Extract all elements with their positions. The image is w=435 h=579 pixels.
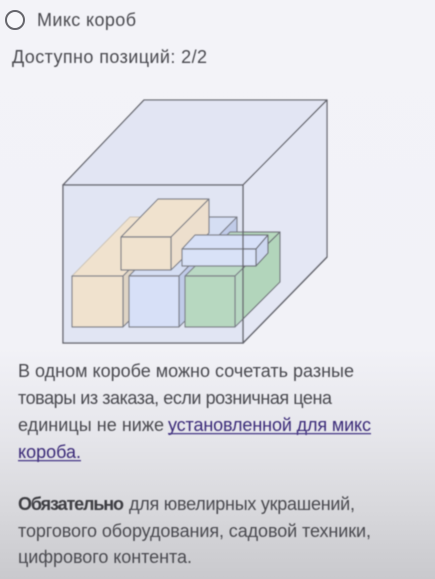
description paragraph bbox=[18, 361, 371, 462]
link: установленной для микс bbox=[168, 415, 371, 435]
description paragraph: В одном коробе можно сочетать разные bbox=[18, 361, 354, 381]
available positions: Доступно позиций: 2/2 bbox=[12, 47, 207, 67]
illustration: mixed box bbox=[63, 100, 327, 343]
link bbox=[18, 415, 371, 462]
mandatory paragraph: для ювелирных украшений, bbox=[129, 494, 355, 514]
mandatory paragraph: торгового оборудования, садовой техники, bbox=[18, 521, 371, 541]
link: короба. bbox=[18, 442, 81, 462]
blue flat box bbox=[182, 235, 268, 266]
mandatory paragraph bbox=[18, 494, 371, 567]
description paragraph: товары из заказа, если розничная цена bbox=[18, 388, 333, 408]
radio button bbox=[6, 11, 24, 29]
option title: Микс короб bbox=[37, 10, 136, 30]
orange long box bbox=[121, 199, 209, 270]
green cube bbox=[185, 232, 280, 327]
description paragraph: единицы не ниже bbox=[18, 415, 164, 435]
orange cube bbox=[72, 217, 181, 327]
blue cube bbox=[129, 217, 237, 327]
box front edges bbox=[63, 185, 327, 343]
box back faces bbox=[63, 100, 327, 343]
mandatory paragraph: Обязательно bbox=[18, 494, 124, 514]
mandatory paragraph: цифрового контента. bbox=[18, 547, 192, 567]
